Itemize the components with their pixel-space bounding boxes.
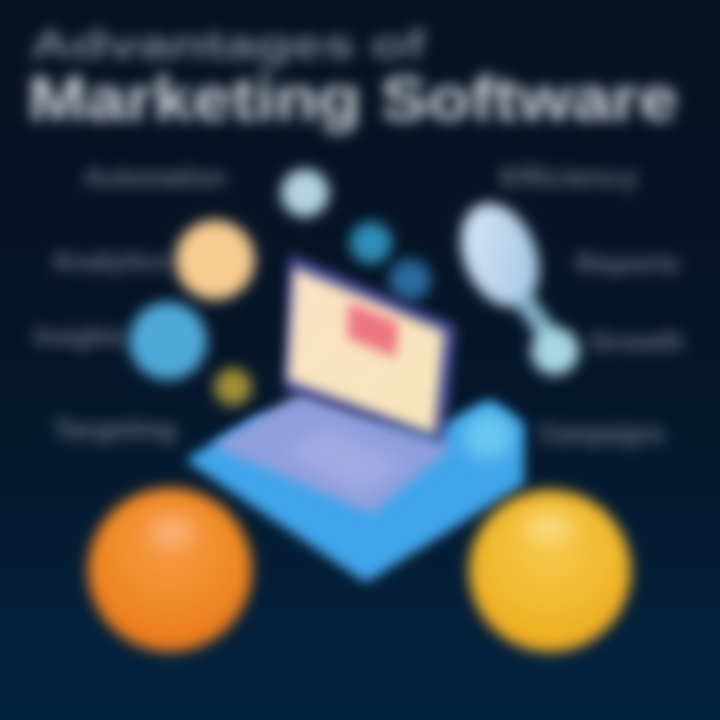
title: Marketing Software bbox=[28, 65, 678, 134]
left labels: Automation bbox=[84, 162, 226, 192]
laptop screen bbox=[288, 268, 444, 434]
orange highlight bbox=[150, 518, 194, 546]
laptop keys bbox=[284, 428, 404, 494]
corner accent bbox=[464, 412, 512, 460]
left labels bbox=[34, 162, 226, 444]
right labels bbox=[500, 162, 684, 448]
left labels: Insights bbox=[34, 321, 126, 351]
right labels: Reports bbox=[576, 248, 680, 278]
title bbox=[28, 24, 678, 134]
screen red block bbox=[348, 302, 398, 358]
icon: dark blue circle bbox=[389, 259, 431, 301]
left labels: Analytics bbox=[52, 246, 170, 276]
icon: small gold circle bbox=[214, 368, 252, 406]
yellow highlight bbox=[524, 515, 572, 541]
icon: small pale circle bbox=[281, 169, 329, 217]
laptop keyboard bbox=[212, 390, 454, 514]
title: Advantages of bbox=[30, 24, 426, 67]
right labels: Campaigns bbox=[540, 418, 664, 448]
laptop screen frame bbox=[284, 254, 456, 444]
icon: teal circle bbox=[350, 222, 392, 264]
icon: magnifier bbox=[446, 191, 579, 375]
right labels: Growth bbox=[590, 326, 684, 356]
icon: blue circle bbox=[129, 302, 207, 380]
left labels: Targeting bbox=[54, 414, 176, 444]
laptop bbox=[192, 254, 520, 578]
right labels: Efficiency bbox=[500, 162, 639, 192]
yellow sphere bbox=[469, 490, 631, 652]
laptop base bbox=[192, 404, 520, 578]
orange sphere bbox=[88, 488, 252, 652]
icon: peach circle bbox=[175, 220, 255, 300]
